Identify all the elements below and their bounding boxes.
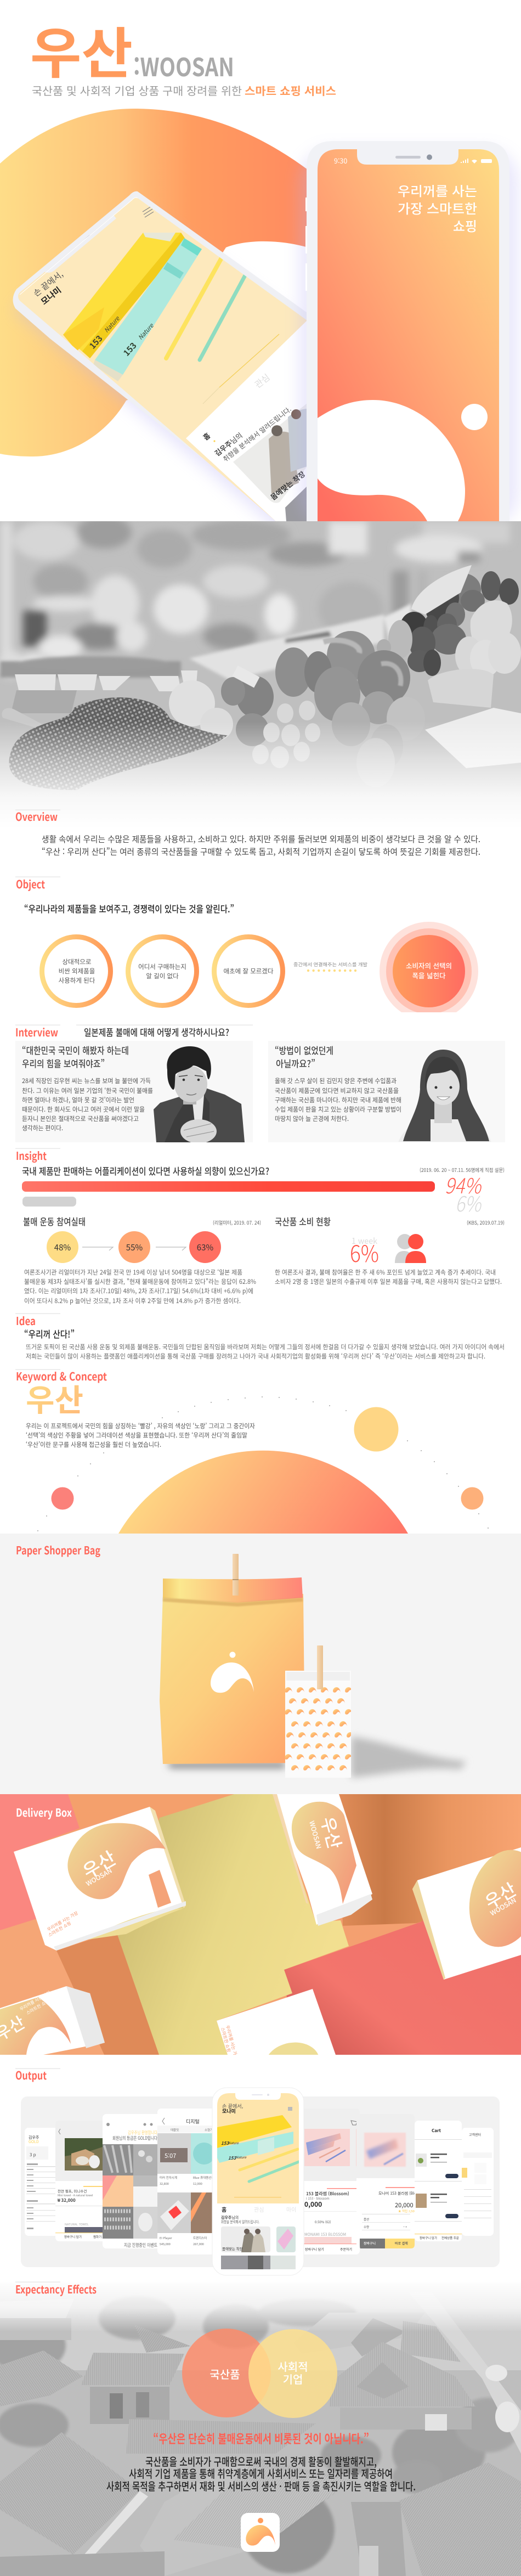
roofs	[0, 2299, 521, 2576]
screen: product detail towel: ₩ 32,000	[57, 2197, 76, 2203]
sub-panel: domestic consumption	[275, 1214, 505, 1286]
central phone: 153	[228, 2155, 236, 2161]
heading: Insight	[16, 1147, 47, 1163]
pale grapes	[169, 681, 403, 768]
app logo shape on screen	[318, 400, 465, 521]
portrait: woman	[398, 1050, 491, 1142]
title: 우산	[30, 9, 133, 89]
box illustrations	[217, 2115, 292, 2148]
central phone: Nature	[236, 2155, 247, 2160]
screen: home grid: 지금 진행중인 이벤트	[124, 2242, 157, 2248]
ring: expensive imports: 비싼 외제품을	[59, 967, 95, 976]
ring: no way to know: 알 길이 없다	[146, 972, 179, 980]
section: insight	[15, 1147, 505, 1305]
screen: product detail towel	[55, 2121, 110, 2241]
screen: product detail towel: NATURAL TOWEL	[65, 2222, 89, 2226]
card: female interviewee: 수입 제품이 판을 치고 있는 상황이라 구분할 방법이	[275, 1105, 401, 1114]
clothespin	[317, 1645, 323, 1689]
screen: my page far left	[25, 2128, 63, 2236]
white fade to page	[0, 721, 521, 828]
phone screen: 모나미	[38, 284, 64, 307]
concept text	[26, 1422, 255, 1449]
hero blob background	[0, 109, 310, 456]
ring: no way to know	[128, 937, 196, 1005]
grey panel	[21, 2096, 500, 2267]
box center: WOOSAN	[307, 1820, 324, 1850]
survey bars: 94%	[445, 1169, 482, 1199]
sub-panel: boycott participation: 여론조사기관 리얼미터가 지난 24일 전국 만 19세 이상 남녀 504명을 대상으로 ‘일본 제품	[24, 1268, 242, 1277]
sub-panel: boycott participation: 48%	[54, 1242, 71, 1253]
sub-panel: boycott participation: 이어 또다시 8.2% p 늘어난 것으로, 1차 조사 이후 2주일 만에 14.8% p가 증가한 셈이다.	[24, 1297, 241, 1305]
screen: digital category: 545,000	[160, 2242, 171, 2246]
screen: product detail towel: 장바구니 담기	[64, 2235, 82, 2239]
box left: 우산	[77, 1844, 120, 1884]
phone screen: 취향을 분석해서 알려드립니다.	[221, 404, 293, 464]
floor shadows	[167, 1737, 466, 1778]
phone screen: 김우주님의	[212, 430, 245, 458]
screen: digital category	[157, 2109, 218, 2254]
screen: digital category: 12,900	[193, 2182, 202, 2186]
box center	[273, 1794, 372, 1926]
phone screen: 홈	[201, 430, 212, 442]
body text: “우산 : 우리꺼 산다”는 여러 종류의 국산품들을 구매할 수 있도록 돕고, 사회적 기업까지 손길이 닿도록 하여 뜻깊은 기회를 제공한다.	[42, 845, 480, 858]
phone body	[13, 191, 307, 449]
cherries	[9, 697, 228, 790]
box right	[412, 1842, 521, 1980]
cards	[221, 2226, 270, 2252]
box lower left: 스마트한 쇼핑	[25, 1998, 50, 2016]
screen: digital category: 소형가	[205, 2128, 213, 2132]
box lower left	[0, 1986, 105, 2055]
subtitle: 국산품 및 사회적 기업 상품 구매 장려를 위한	[32, 82, 242, 98]
screen: right purchase options: − +	[403, 2225, 407, 2229]
screen: far right list: 고객센터	[469, 2132, 481, 2137]
screen: right product pink	[296, 2109, 360, 2254]
logo pattern	[285, 1687, 354, 1771]
card: male interviewee: 찬다. 그 이유는 여러 일본 기업의 ‘한국 국민이 불매를	[22, 1086, 153, 1095]
right phone mockup	[299, 141, 518, 527]
section: overview	[15, 808, 480, 858]
screen: digital category: 트랜지스터	[193, 2236, 207, 2240]
phone screen: Nature	[136, 321, 156, 342]
hero slogan: 우리꺼를 사는	[398, 181, 477, 200]
phone screen	[18, 198, 307, 521]
screen: right product pink: 153 블라썸 (Blossom)	[306, 2191, 349, 2197]
screen: home grid	[103, 2114, 165, 2248]
central phone: 모나미	[222, 2107, 236, 2115]
heading: Paper Shopper Bag	[16, 1542, 100, 1558]
idea quote: “우리꺼 산다!”	[24, 1327, 75, 1340]
pens	[240, 2149, 298, 2170]
screen: digital category: 5:07	[165, 2151, 176, 2160]
menu icon	[143, 206, 154, 217]
hero slogan: 쇼핑	[453, 216, 477, 235]
central phone: 마이	[286, 2205, 296, 2213]
survey bars: 6%	[455, 1187, 482, 1217]
connector label and dots	[293, 961, 367, 972]
section: delivery box	[0, 1794, 521, 2088]
box lower center: 우리꺼를 사는 가장	[224, 2025, 239, 2060]
orbit dots	[37, 1396, 489, 1531]
section: idea: 뜨거운 토픽이 된 국산품 사용 운동 및 외제품 불매운동. 국민들의 단합된 움직임을 바라보며 저희는 어떻게 그들의 정서에 한걸음 더 다가갈 수 있을지 생각해 보았습니다. 여러 가지 아이디어 속에서	[26, 1343, 505, 1351]
venn diagram: 사회적	[278, 2358, 308, 2374]
section: interview	[15, 1024, 505, 1143]
card: female interviewee: 마땅치 않아 늘 곤경에 처한다.	[275, 1114, 349, 1123]
concept dome	[118, 1451, 408, 1534]
box lower center: 스마트한 쇼핑	[219, 2027, 232, 2053]
closing text: 사회적 목적을 추구하면서 재화 및 서비스의 생산 · 판매 등 을 촉진시키는 역할을 합니다.	[106, 2478, 416, 2494]
heading: Delivery Box	[16, 1804, 72, 1820]
heading: Expectancy Effects	[15, 2281, 97, 2297]
screen: cart: 장바구니 담기	[420, 2236, 437, 2240]
title: :WOOSAN	[133, 48, 234, 84]
market photo	[0, 521, 521, 796]
portrait: man	[154, 1046, 245, 1143]
box left: 우리꺼를 사는 가장	[46, 1910, 80, 1933]
yellow panel	[116, 1794, 349, 2055]
hanok village photo	[0, 2280, 521, 2576]
venn diagram: 국산품	[209, 2366, 240, 2382]
screen: right product pink: MONAMI 153 BLOSSOM	[304, 2232, 346, 2237]
sub-panel: domestic consumption: 한 여론조사 결과, 불매 참여율은 한 주 새 6% 포인트 넘게 늘었고 계속 증가 추세이다. 국내	[275, 1268, 496, 1277]
screen: digital category: EI Player	[160, 2236, 172, 2240]
screen: right purchase options: 수량	[364, 2225, 369, 2229]
card: female interviewee: “방법이 없었던게	[275, 1043, 333, 1057]
card: female interviewee: 아닐까요?”	[276, 1056, 315, 1070]
venn diagram	[182, 2329, 337, 2418]
hero slogan	[398, 181, 477, 235]
screen: product detail towel: Mini towel - A natural towel	[58, 2194, 93, 2197]
screen: cart	[415, 2121, 462, 2241]
logo mark on bag	[229, 1651, 236, 1658]
blurred background market stalls	[0, 516, 510, 680]
white veil over photo	[0, 2282, 521, 2576]
card: female interviewee: 국산품이 제품군에 있다면 비교하지 않고 국산품을	[275, 1086, 399, 1095]
subtitle	[32, 82, 336, 98]
box right: WOOSAN	[488, 1896, 518, 1918]
subtitle: 스마트 쇼핑 서비스	[245, 82, 336, 98]
pens	[166, 253, 224, 358]
sub-panel: boycott participation: (리얼미터, 2019. 07. 24)	[213, 1219, 261, 1226]
concept text: 우리는 이 프로젝트에서 국민의 힘을 상징하는 ‘빨강’ , 자유의 색상인 ‘노랑’ 그리고 그 중간이자	[26, 1422, 255, 1430]
product card	[233, 403, 307, 503]
left phone mockup	[13, 191, 307, 521]
status bar: 9:30	[334, 155, 347, 166]
screen: right product pink: i 153 - blossom	[306, 2196, 330, 2201]
title	[30, 9, 234, 89]
floating circles	[52, 1407, 484, 1510]
venn diagram: 기업	[283, 2371, 303, 2387]
box right: 우산	[480, 1876, 520, 1914]
sub-panel: boycott participation	[23, 1214, 261, 1305]
red panels	[0, 1794, 80, 1930]
sub-panel: domestic consumption: 소비자 2명 중 1명은 일본의 수출규제 이후 일본 제품을 구매, 혹은 사용하지 않는다고 답했다.	[275, 1277, 502, 1286]
screen: digital category: 디지털	[186, 2118, 200, 2125]
box left	[14, 1807, 186, 1951]
screen: digital category: Blue 휴대용선풍기	[193, 2175, 217, 2180]
screen: digital category: 미러 전자시계	[160, 2175, 177, 2180]
box lower left: 우리꺼를 사는 가장	[19, 1989, 52, 2013]
central phone	[212, 2088, 304, 2275]
card: male interviewee: 때문이다. 한 회사도 아니고 여러 곳에서 이런 말을	[22, 1105, 145, 1114]
closing text: 국산품을 소비자가 구매함으로써 국내의 경제 활동이 활발해지고,	[145, 2453, 377, 2469]
screen: right purchase options: 옵션	[364, 2217, 369, 2222]
big target circle	[380, 922, 478, 1021]
closing text	[106, 2453, 416, 2494]
screen: right purchase options: 모나미 153 블라썸 (Blossom)	[378, 2191, 427, 2196]
screen: right purchase options: 장바구니	[364, 2241, 376, 2246]
screen: right product pink: 0,000	[304, 2200, 322, 2209]
section: idea: 저희는 국민들이 많이 사용하는 플랫폼인 애플리케이션을 통해 국산품 구매를 장려하고 나아가 국내 사회적기업의 활성화를 위해 ‘우리꺼 산다’ 즉 ‘우산’이라는 서비스를 제안하고자 합니다.	[26, 1352, 485, 1361]
heading: Object	[16, 876, 45, 892]
heading: Keyword & Concept	[16, 1368, 107, 1384]
card: male interviewee: 생각하는 편이다.	[22, 1124, 63, 1132]
screen: right product pink: 장바구니 담기	[305, 2247, 324, 2252]
card: male interviewee: “대한민국 국민이 해봤자 하는데	[22, 1043, 129, 1057]
screen: cart: 전체상품 주문	[441, 2236, 459, 2240]
section: keyword and concept	[15, 1368, 489, 1534]
red statement: “우산은 단순히 불매운동에서 비롯된 것이 아닙니다.”	[153, 2430, 369, 2447]
central phone: 관심	[254, 2205, 264, 2213]
phone screen: 153	[87, 333, 105, 351]
small patterned bag	[285, 1645, 354, 1778]
quote: “우리나라의 제품들을 보여주고, 경쟁력이 있다는 것을 알린다.”	[24, 901, 234, 915]
sub-panel: domestic consumption: 1 week	[352, 1235, 378, 1247]
screen: digital category: 태블릿	[171, 2128, 179, 2132]
card: male interviewee: 우리의 힘을 보여줘야죠”	[22, 1056, 105, 1070]
screen: my page far left: GOLD	[29, 2139, 39, 2145]
heading: Interview	[15, 1024, 58, 1040]
box center: 우산	[315, 1814, 348, 1851]
app icon	[241, 2513, 280, 2552]
central phone: 홈	[222, 2205, 226, 2213]
section: object	[15, 876, 478, 1021]
screen: home grid: 김우주님 환영합니다	[128, 2129, 157, 2136]
growth arrows	[82, 1247, 186, 1250]
screen: right purchase options: 바로 결제	[395, 2241, 408, 2246]
card: male interviewee: 하면 얼마나 하겠나, 얼마 못 갈 것’이라는 발언	[22, 1096, 134, 1104]
screen: right purchase options: ★ 적립 2,500	[398, 2209, 416, 2213]
plastic bag and pale fruit	[471, 600, 512, 642]
box left: 스마트한 쇼핑	[47, 1920, 72, 1938]
sub-panel: boycott participation: 불매운동 제3차 실태조사’를 실시한 결과, "현재 불매운동에 참여하고 있다"라는 응답이 62.8%	[24, 1277, 256, 1286]
phone screen: 153	[121, 340, 139, 358]
closing text: 사회적 기업 제품을 통해 취약계층에게 사회서비스 또는 일자리를 제공하여	[129, 2465, 393, 2481]
body text	[42, 833, 480, 858]
screen: digital category: 32,800	[160, 2182, 169, 2186]
screen: right product pink: 주문하기	[340, 2247, 352, 2252]
screen: far right list	[462, 2128, 494, 2236]
phone body	[307, 141, 509, 521]
phone screen: 몸에맞는 착장	[268, 469, 307, 502]
sub-panel: boycott participation: 55%	[126, 1242, 143, 1253]
status bar	[334, 155, 492, 166]
phone UI text: 손 끝에서,	[222, 2102, 243, 2110]
white baskets	[15, 670, 197, 691]
card: female interviewee: 올해 갓 스무 살이 된 김민지 양은 주변에 수입품과	[275, 1076, 397, 1085]
body text: 생활 속에서 우리는 수많은 제품들을 사용하고, 소비하고 있다. 하지만 주위를 둘러보면 외제품의 비중이 생각보다 큰 것을 알 수 있다.	[42, 833, 480, 845]
card: female interviewee	[268, 1041, 505, 1142]
section: idea	[15, 1312, 505, 1361]
screen: product detail towel: 천연 펄프, 미니수건	[58, 2188, 87, 2194]
big target circle: 폭을 넓힌다	[412, 970, 446, 980]
hero slogan: 가장 스마트한	[398, 198, 477, 217]
heading: Output	[15, 2067, 47, 2083]
street	[409, 2292, 521, 2454]
survey question: 국내 제품만 판매하는 어플리케이션이 있다면 사용하실 의향이 있으신가요?	[22, 1164, 269, 1177]
sub-panel: domestic consumption: 국산품 소비 현황	[275, 1214, 331, 1228]
clothespin	[233, 1554, 239, 1596]
participation circles	[47, 1231, 78, 1263]
sub-panel: domestic consumption: 6%	[350, 1236, 379, 1269]
yellow pen box	[63, 233, 186, 358]
heading: Overview	[15, 808, 58, 824]
concept text: ‘우산’이란 문구를 사용해 접근성을 훨씬 더 높였습니다.	[26, 1440, 161, 1449]
screen: right purchase options	[356, 2114, 427, 2248]
screen: digital category: 287,000	[193, 2242, 204, 2246]
speaker	[252, 2094, 263, 2095]
central phone: Nature	[228, 2140, 239, 2145]
phone UI text: 손 끝에서,	[31, 268, 65, 299]
bell peppers	[221, 631, 410, 746]
sub-panel: boycott participation: 불매 운동 참여실태	[23, 1214, 86, 1228]
people icon	[395, 1234, 426, 1263]
screen: right purchase options: 20,000	[395, 2201, 414, 2209]
large paper bag	[160, 1554, 304, 1764]
purple fruit pile	[400, 571, 519, 676]
sub-panel: boycott participation: 였다. 이는 리얼미터의 1차 조사(7.10일) 48%, 2차 조사(7.17일) 54.6%(1차 대비 +6.6% p)에	[24, 1287, 253, 1295]
card: female interviewee: 구매하는 국산품 마니아다. 하지만 국내 제품에 반해	[275, 1096, 401, 1104]
card: male interviewee: 28세 직장인 김우현 씨는 뉴스를 보며 늘 불만에 가득	[22, 1076, 151, 1085]
screen: home grid: 회원님의 등급은 GOLD입니다	[112, 2135, 157, 2141]
ring: expensive imports: 사용하게 된다	[59, 976, 95, 985]
screen: right product pink: 0.50% (62)	[315, 2219, 331, 2224]
big target circle: 소비자의 선택의	[406, 960, 452, 971]
section: paper shopper bag	[0, 1534, 521, 1794]
ring: unfamiliar	[214, 937, 283, 1005]
connector label and dots: 중간에서 연결해주는 서비스를 개발	[293, 961, 367, 968]
card: male interviewee	[15, 1041, 253, 1143]
section: expectancy effects	[0, 2280, 521, 2576]
screen: product detail towel: 찜하기	[93, 2235, 101, 2239]
teal pen box	[95, 238, 202, 375]
sub-panel: boycott participation: 63%	[197, 1242, 213, 1253]
wordmark: 우산	[26, 1376, 83, 1421]
shaded orange backdrop	[339, 1794, 521, 1926]
phone bezel highlight	[20, 198, 138, 295]
speaker and camera	[395, 156, 421, 159]
screen: my page far left: 김우주	[29, 2135, 39, 2140]
box left: WOOSAN	[84, 1866, 114, 1888]
heading: Idea	[16, 1312, 36, 1328]
central phone: 153	[221, 2140, 229, 2146]
screen: my page far left: 3 p	[30, 2152, 36, 2158]
phone screen	[318, 149, 499, 521]
central phone: 김우주님의	[221, 2215, 239, 2220]
survey bars	[22, 1169, 482, 1217]
section: interview: 일본제품 불매에 대해 어떻게 생각하시나요?	[84, 1025, 229, 1039]
screen: cart: Cart	[432, 2128, 441, 2134]
notch	[45, 215, 116, 273]
box lower center	[217, 1989, 336, 2088]
phone screen: Nature	[102, 314, 122, 335]
ring: unfamiliar: 애초에 잘 모르겠다	[223, 967, 274, 976]
indicator lines	[219, 334, 279, 387]
top white fade	[0, 2280, 521, 2332]
ring: expensive imports: 상대적으로	[63, 957, 91, 966]
section: insight: (2019. 06. 20 ~ 07.11. 56명에게 직접 설문)	[420, 1166, 505, 1174]
central phone: 취향을 분석해서 알려드립니다.	[221, 2219, 259, 2224]
ring: expensive imports	[42, 937, 111, 1005]
section: output	[15, 2067, 500, 2275]
ring: no way to know: 어디서 구매하는지	[138, 962, 186, 971]
concept text: ‘선택’의 색상인 주황을 넣어 그라데이션 색상을 표현했습니다. 또한 ‘우리꺼 산다’의 줄임말	[26, 1431, 247, 1440]
card: male interviewee: 듣자니 본인은 절대적으로 국산품을 써야겠다고	[22, 1114, 139, 1123]
central phone: 몸에맞는 착장	[222, 2246, 243, 2251]
phone screen: 관심	[251, 370, 272, 391]
sub-panel: domestic consumption: (KBS, 2019.07.19)	[467, 1219, 505, 1226]
